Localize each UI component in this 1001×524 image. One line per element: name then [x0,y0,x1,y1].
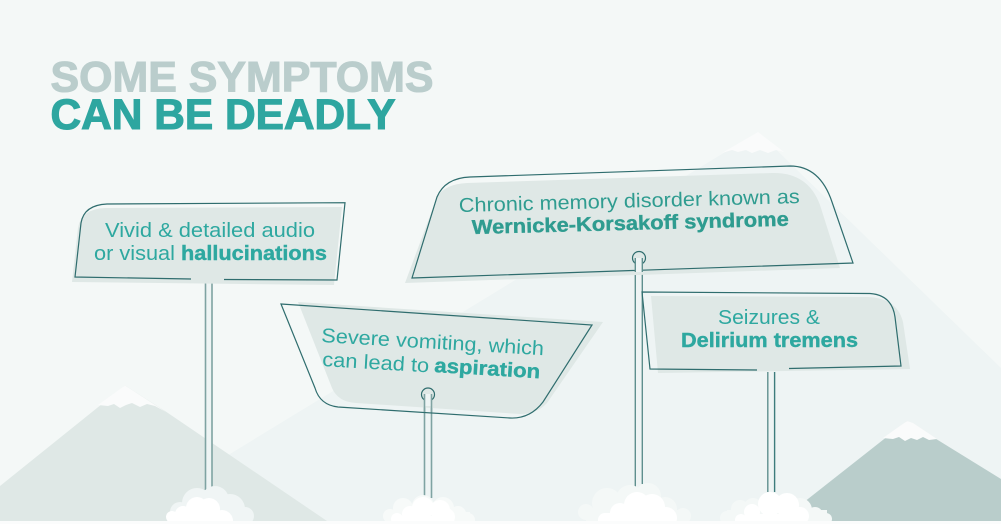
sign: hallucinations: or visual [94,243,175,265]
sign: Wernicke-Korsakoff: Wernicke-Korsakoff syndrome [472,209,789,239]
sign: delirium tremens: Seizures & [718,307,821,329]
title: SOME SYMPTOMS [50,54,433,102]
title [50,54,433,139]
sign: aspiration [281,302,603,418]
sign: Wernicke-Korsakoff [405,166,853,283]
cloud 4 [735,492,832,521]
back mountain [120,132,1001,521]
cloud 1 [166,486,254,524]
post: delirium tremens sign [768,372,775,496]
sign: aspiration: can lead to [322,349,430,377]
sign: hallucinations: Vivid & detailed audio [105,220,315,242]
post: hallucinations sign [205,280,212,492]
post: aspiration sign [424,394,432,500]
sign: delirium tremens: Delirium tremens [681,330,858,352]
cloud 3 [598,486,677,521]
sign: aspiration: Severe vomiting, which [321,325,545,360]
left mountain [0,386,327,521]
sign: hallucinations [72,203,345,285]
sign: delirium tremens [642,292,910,373]
right mountain [806,422,1001,521]
cloud 2 [383,495,475,521]
sign: aspiration: aspiration [434,355,541,383]
post: Wernicke-Korsakoff sign [635,258,643,490]
sign: Wernicke-Korsakoff: Chronic memory disorder known as [459,186,800,217]
title: CAN BE DEADLY [50,92,396,139]
sign: hallucinations: hallucinations [181,243,327,265]
